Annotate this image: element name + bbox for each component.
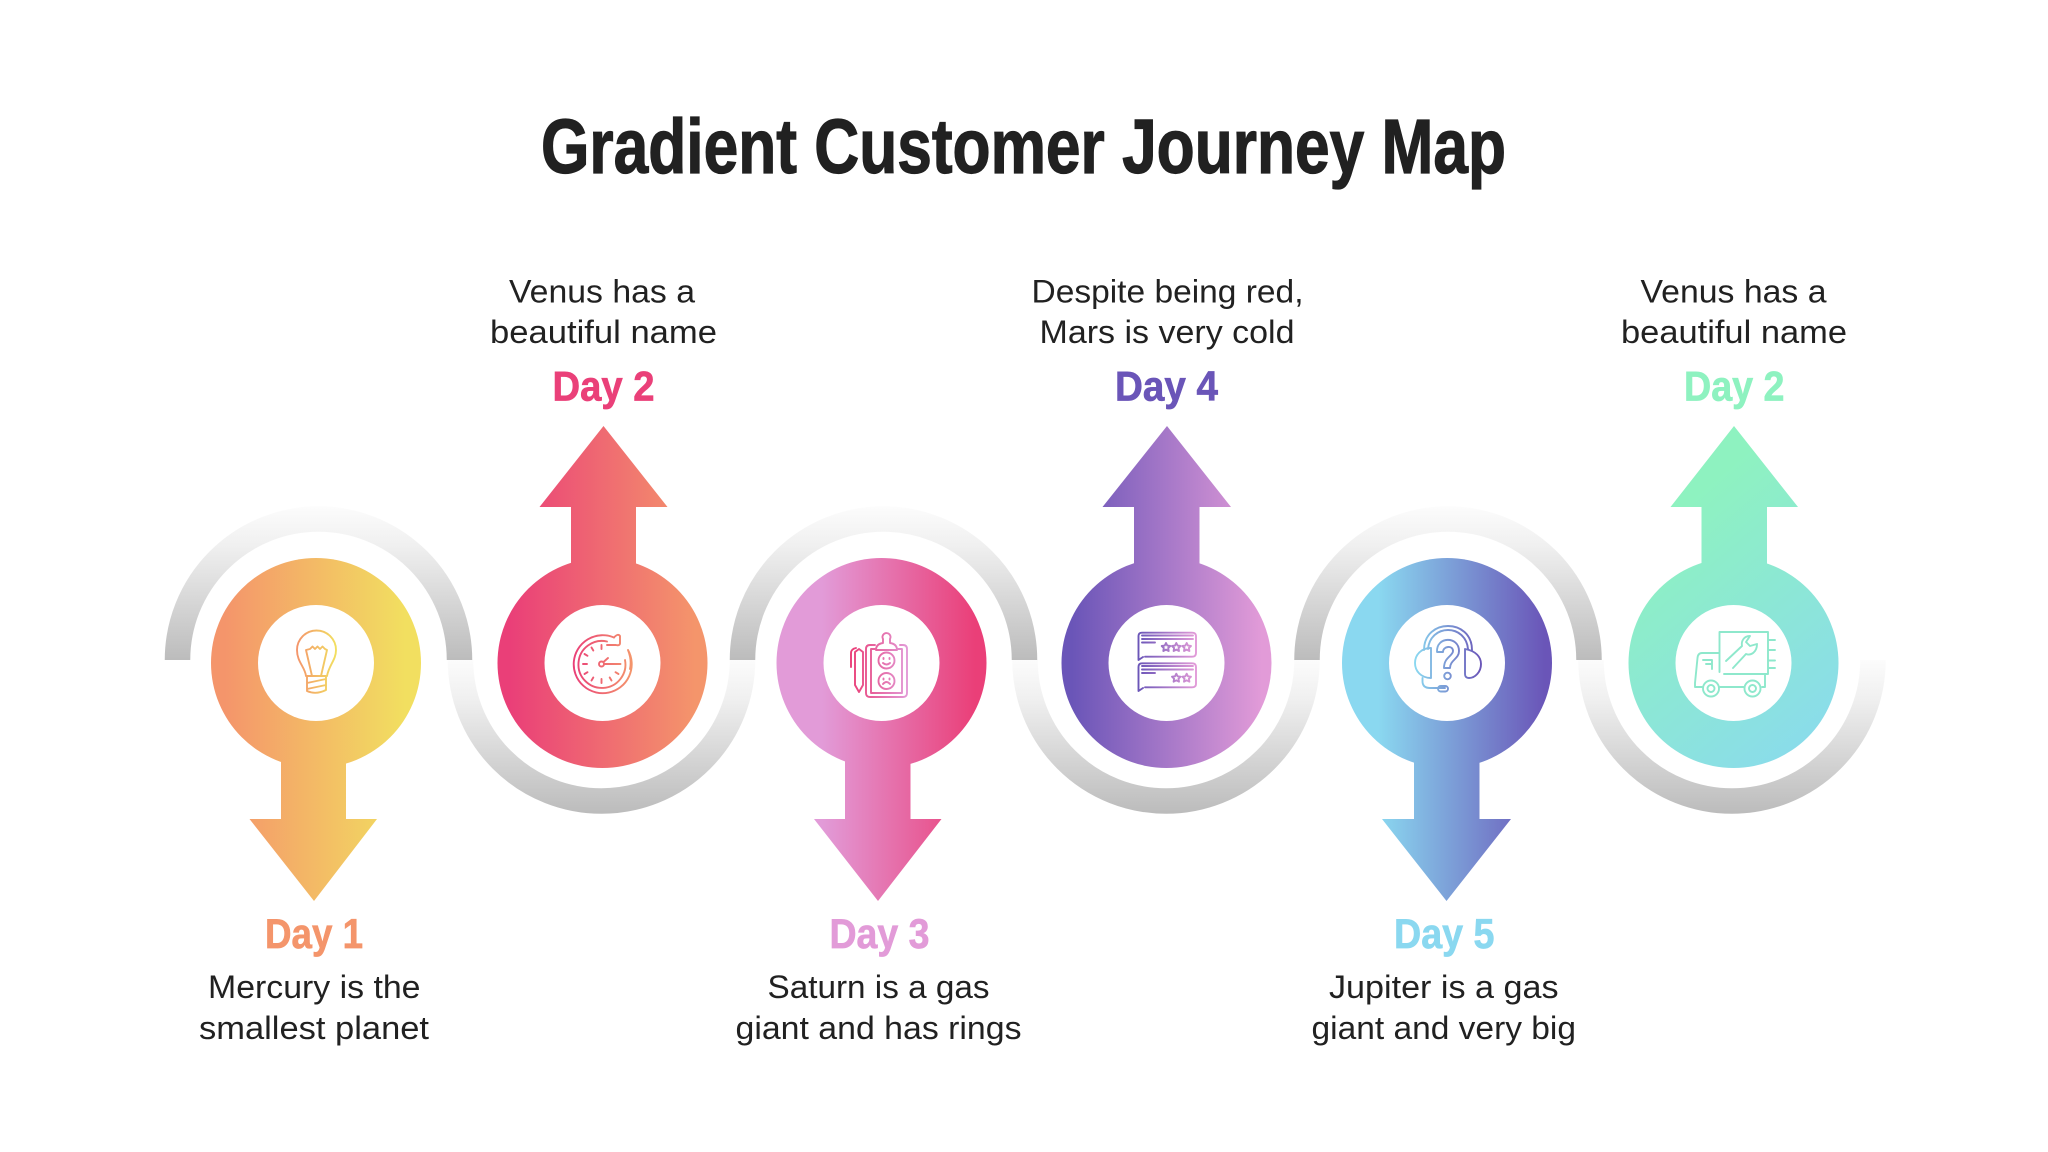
day 3 description <box>736 969 1022 1046</box>
icon disc 6 <box>1676 605 1792 721</box>
track arc 1 <box>178 519 460 660</box>
final day 2 label: Day 2 <box>1684 362 1784 410</box>
icon: support headset <box>1415 626 1481 692</box>
icon: repair truck <box>1695 632 1775 696</box>
final day 2 description: beautiful name <box>1621 314 1847 350</box>
day 3 label: Day 3 <box>830 910 930 957</box>
step: day 1 <box>178 519 460 1046</box>
icon disc 1 <box>258 605 374 721</box>
day 1 description: Mercury is the <box>208 969 420 1005</box>
day 2 description: beautiful name <box>490 314 717 350</box>
day 2 description <box>490 274 717 350</box>
day 1 description: smallest planet <box>199 1010 429 1046</box>
step: final day 2 <box>1591 274 1873 801</box>
icon: review bubbles <box>1138 633 1196 691</box>
day 4 description: Mars is very cold <box>1040 314 1294 350</box>
step: day 4 <box>1025 274 1307 801</box>
track arc 5 <box>1307 519 1589 660</box>
day 3 description: giant and has rings <box>736 1010 1022 1046</box>
day 1 label: Day 1 <box>265 910 363 957</box>
track arc 6 <box>1591 660 1873 801</box>
pin arrow 1 <box>211 558 421 901</box>
step: day 3 <box>736 519 1024 1046</box>
icon: clock <box>574 635 632 693</box>
icon disc 3 <box>824 605 940 721</box>
track arc 4 <box>1025 660 1307 801</box>
day 4 description <box>1032 274 1304 350</box>
pin arrow 4 <box>1062 426 1272 768</box>
step: day 5 <box>1307 519 1589 1046</box>
day 5 label: Day 5 <box>1394 910 1494 957</box>
icon: light bulb <box>297 630 336 693</box>
day 5 description: giant and very big <box>1312 1010 1576 1046</box>
track arc 3 <box>742 519 1024 660</box>
day 4 description: Despite being red, <box>1032 274 1304 310</box>
day 1 description <box>199 969 429 1046</box>
day 2 label: Day 2 <box>552 362 654 410</box>
day 5 description <box>1312 969 1576 1046</box>
day 3 description: Saturn is a gas <box>768 969 990 1005</box>
pin arrow 2 <box>498 426 708 768</box>
pin arrow 5 <box>1342 558 1552 901</box>
final day 2 description <box>1621 274 1847 350</box>
pin arrow 6 <box>1628 426 1838 768</box>
pin arrow 3 <box>776 558 986 901</box>
track arc 2 <box>460 660 742 801</box>
icon disc 5 <box>1389 605 1505 721</box>
final day 2 description: Venus has a <box>1640 274 1827 310</box>
title: Gradient Customer Journey Map <box>541 104 1506 190</box>
icon: feedback clipboard <box>851 633 907 697</box>
day 5 description: Jupiter is a gas <box>1329 969 1558 1005</box>
icon disc 4 <box>1108 605 1224 721</box>
day 4 label: Day 4 <box>1115 362 1219 410</box>
day 2 description: Venus has a <box>509 274 695 310</box>
step: day 2 <box>460 274 742 801</box>
icon disc 2 <box>544 605 660 721</box>
